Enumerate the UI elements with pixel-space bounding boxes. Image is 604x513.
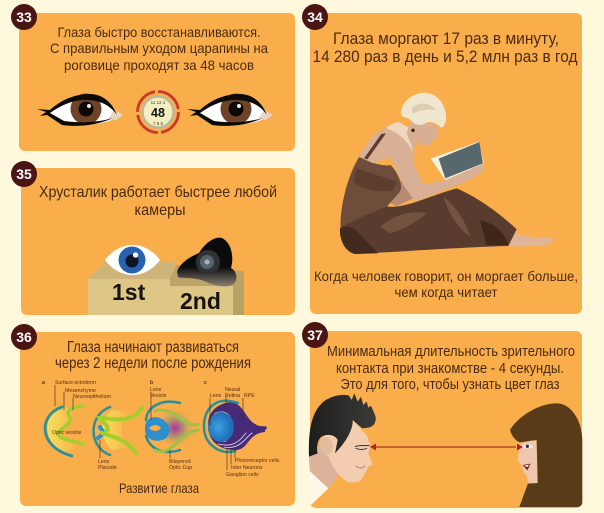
earring <box>411 129 415 132</box>
diagram labels: Lens <box>210 393 222 399</box>
torso skin behind arm <box>387 180 417 206</box>
diagram labels: Neural <box>225 387 240 393</box>
heading: fact 33: роговице проходят за 48 часов <box>64 57 254 73</box>
hair <box>510 403 582 507</box>
bodice strap <box>364 133 386 159</box>
badge 33 <box>11 4 37 30</box>
heading: fact 33: Глаза быстро восстанавливаются. <box>58 24 260 40</box>
badge 35 <box>11 161 37 187</box>
stage c: mature eye <box>204 396 265 470</box>
heading: fact 35: Хрусталик работает быстрее любой <box>39 184 277 201</box>
diagram labels: Ganglion cells <box>226 472 259 478</box>
diagram labels: Optic vesicle <box>52 430 82 436</box>
heading: fact 37: контакта при знакомстве - 4 секунды. <box>336 360 564 377</box>
diagram labels: Mesenchyme <box>65 388 96 394</box>
badge 37 <box>302 322 328 348</box>
icon: camera lens <box>177 238 236 286</box>
heading: fact 34 <box>312 29 578 66</box>
neck <box>309 442 342 488</box>
diagram labels: Vesicle <box>150 393 167 399</box>
icon: 48 hour clock <box>138 92 178 132</box>
icon: 48 hour clock: 7 6 5 <box>153 121 163 126</box>
diagram labels <box>42 380 280 478</box>
diagram labels: Retina <box>225 393 240 399</box>
back and arm skin <box>358 122 484 202</box>
icon: 48 hour clock: 11 12 1 <box>151 100 166 105</box>
diagram labels: Inter Neurons <box>231 465 263 471</box>
badge 34: 34 <box>307 9 323 25</box>
diagram labels: Lens <box>150 387 162 393</box>
panel: fact 34 <box>302 4 582 314</box>
icon: eye <box>105 245 160 275</box>
heading: fact 36 <box>55 339 251 372</box>
collar <box>310 470 328 504</box>
panel: fact 35 <box>11 161 295 315</box>
badge 36 <box>11 324 37 350</box>
foot <box>508 232 554 247</box>
mouth <box>523 464 531 470</box>
diagram labels: RPE <box>244 393 255 399</box>
note: fact 34 <box>314 268 578 300</box>
stage b: optic cup <box>145 392 198 458</box>
badge 37: 37 <box>307 327 323 343</box>
diagram: eye development stages <box>45 385 265 470</box>
heading: fact 36: через 2 недели после рождения <box>55 355 251 372</box>
badge 33: 33 <box>16 9 32 25</box>
hair <box>309 393 376 457</box>
book <box>431 142 484 180</box>
face <box>518 441 538 484</box>
diagram labels: c <box>204 380 207 386</box>
icon: left eye <box>37 94 123 126</box>
heading: fact 37 <box>327 343 575 393</box>
face <box>322 420 373 483</box>
stage a2: lens placode <box>94 407 142 458</box>
badge 36: 36 <box>16 329 32 345</box>
ear <box>320 437 333 455</box>
panel: fact 33 <box>11 4 295 151</box>
diagram labels: Optic Cup <box>169 465 192 471</box>
diagram labels: Lens <box>98 459 110 465</box>
diagram labels: Placode <box>98 465 117 471</box>
diagram labels: a <box>42 380 45 386</box>
mouth <box>356 466 365 468</box>
illustration: woman with long hair <box>510 403 582 507</box>
heading: fact 33: С правильным уходом царапины на <box>50 40 268 56</box>
illustration: woman reading <box>340 93 554 254</box>
heading: fact 37: Это для того, чтобы узнать цвет глаз <box>340 376 560 393</box>
panel: fact 36 <box>11 324 295 506</box>
heading: fact 35: камеры <box>134 202 186 219</box>
heading: fact 33 <box>50 24 268 73</box>
heading: fact 36: Глаза начинают развиваться <box>67 339 239 356</box>
diagram labels: Photoreceptor cells <box>235 458 280 464</box>
diagram labels: Neuroepithelium <box>73 394 111 400</box>
heading: fact 35 <box>39 184 277 219</box>
eye <box>521 445 533 448</box>
caption: eye development: Развитие глаза <box>119 480 199 496</box>
label: 1st: 1st <box>112 279 146 305</box>
hand <box>457 166 484 183</box>
hair <box>401 93 446 127</box>
icon: right eye <box>187 94 273 126</box>
panel: fact 37 <box>302 322 582 508</box>
diagram labels: b <box>150 380 153 386</box>
note: fact 34: Когда человек говорит, он моргает больше, <box>314 268 578 284</box>
heading: fact 34: 14 280 раз в день и 5,2 млн раз в год <box>312 47 578 66</box>
icon: 48 hour clock: 48 <box>151 106 165 120</box>
label: 2nd: 2nd <box>180 288 221 314</box>
heading: fact 34: Глаза моргают 17 раз в минуту, <box>333 29 559 48</box>
diagram labels: Bilayered <box>169 459 191 465</box>
bodice <box>341 157 401 231</box>
diagram labels: Surface ectoderm <box>55 380 96 386</box>
note: fact 34: чем когда читает <box>394 284 498 300</box>
neck and face <box>407 118 438 153</box>
eye and brow <box>355 446 370 450</box>
illustration: man <box>309 393 376 504</box>
arrow: eye contact line <box>370 444 523 450</box>
badge 35: 35 <box>16 166 32 182</box>
stage a: optic vesicle <box>45 385 83 456</box>
skirt <box>340 188 517 254</box>
podium <box>88 262 244 315</box>
badge 34 <box>302 4 328 30</box>
